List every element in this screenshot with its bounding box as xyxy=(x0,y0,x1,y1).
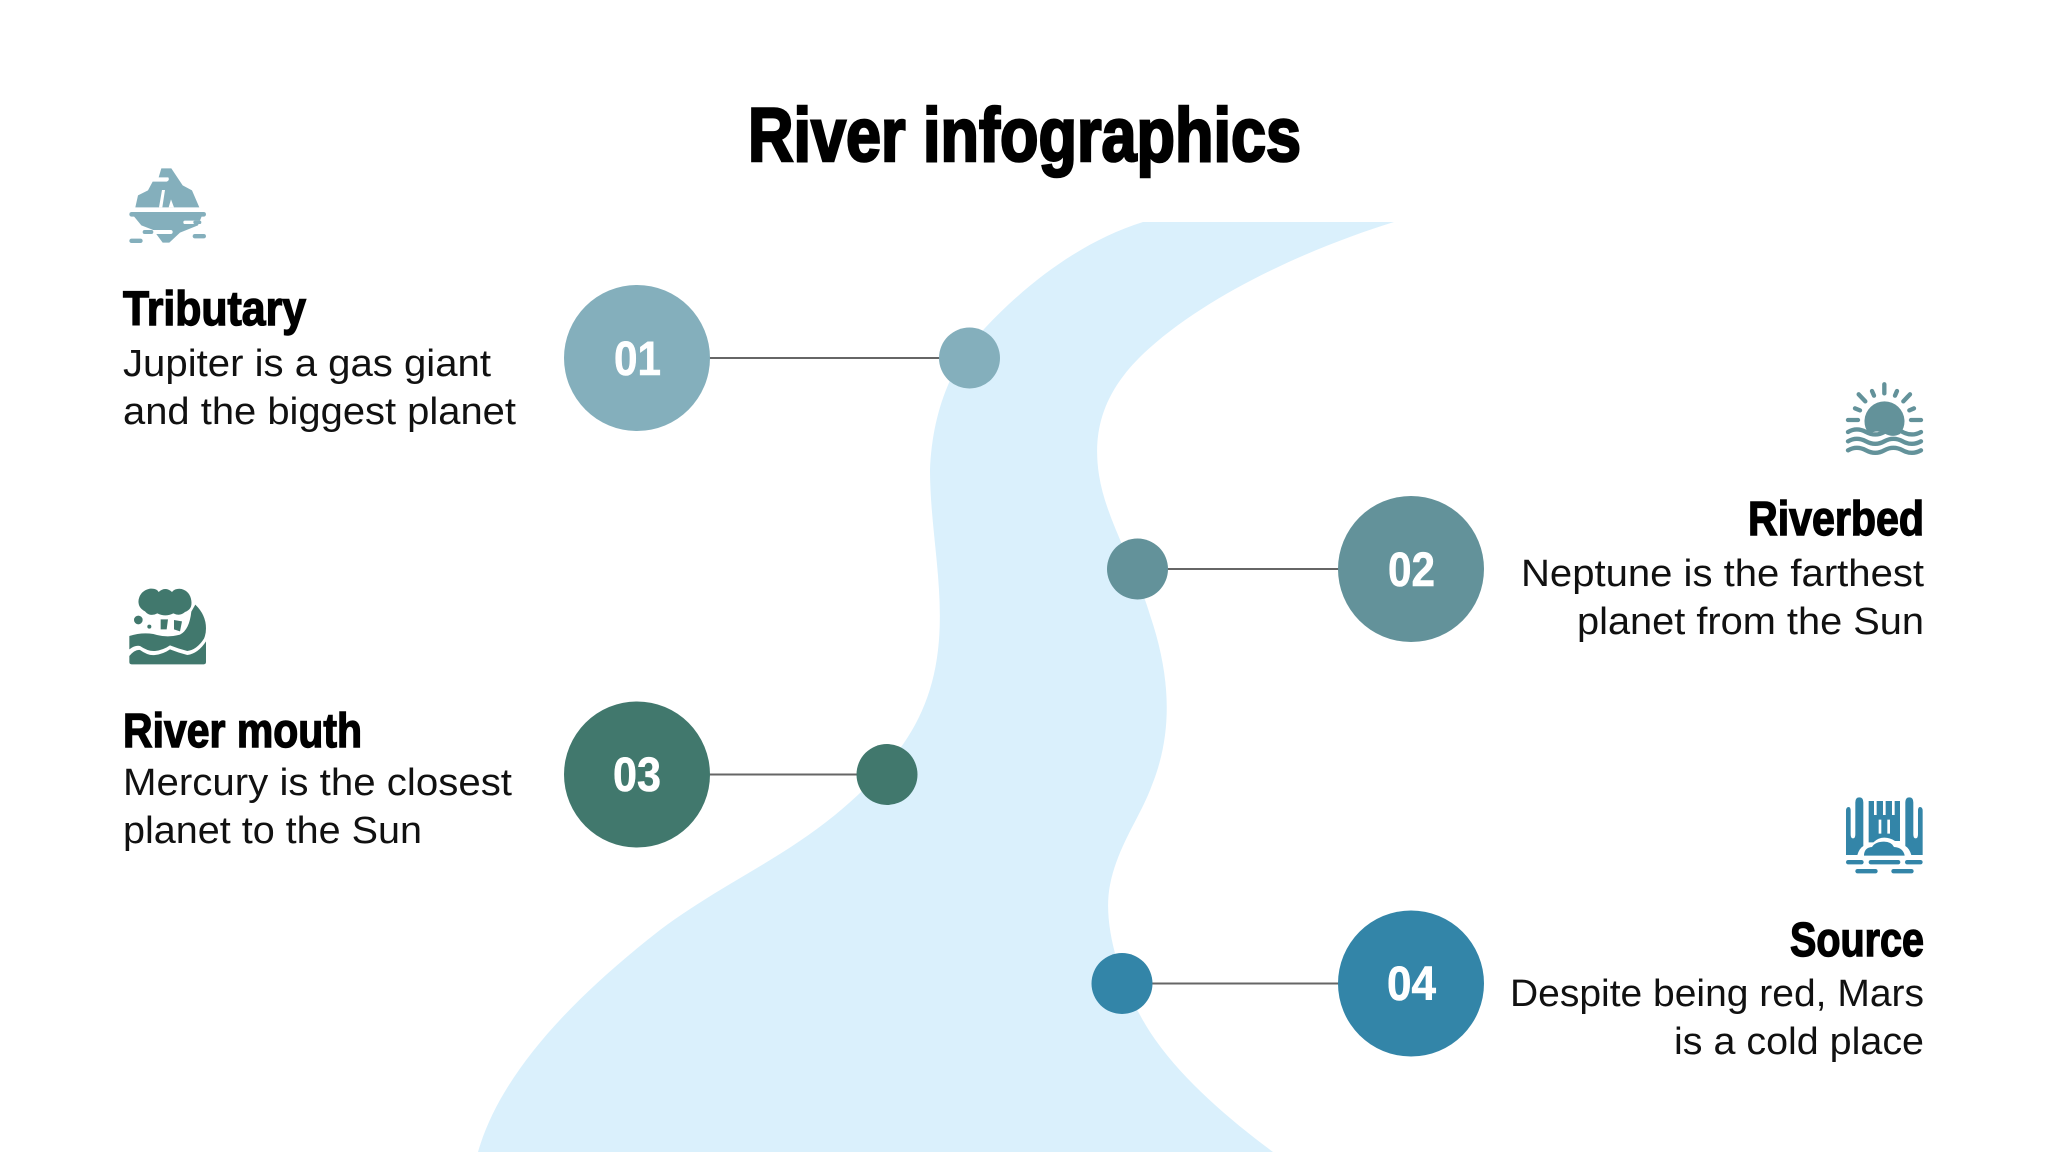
item 03: River mouth xyxy=(123,589,918,852)
description: River mouth: planet to the Sun xyxy=(123,810,422,852)
connector line 04 xyxy=(1145,982,1345,984)
icon: iceberg xyxy=(129,168,206,243)
river shape xyxy=(478,222,1394,1152)
heading: Riverbed: Riverbed xyxy=(1748,493,1924,546)
heading: River mouth: River mouth xyxy=(123,705,362,758)
description: Riverbed: planet from the Sun xyxy=(1577,601,1924,643)
river marker 02 xyxy=(1107,538,1168,600)
item 04: Source xyxy=(1092,797,1924,1063)
description: Source: Despite being red, Mars xyxy=(1510,973,1924,1015)
number circle 02: 02 xyxy=(1388,544,1435,597)
icon: sunset over water xyxy=(1848,384,1921,453)
title: River infographics xyxy=(748,93,1301,178)
river marker 03 xyxy=(856,744,918,805)
description: Riverbed: Neptune is the farthest xyxy=(1521,553,1924,595)
river marker 04 xyxy=(1092,953,1152,1014)
river marker 01 xyxy=(939,328,1000,388)
icon: waterfall xyxy=(1846,797,1923,873)
number circle 03: 03 xyxy=(613,749,661,802)
connector line 02 xyxy=(1160,568,1345,570)
description: Riverbed xyxy=(1521,553,1924,643)
description: River mouth xyxy=(123,762,512,852)
number circle 03 xyxy=(564,702,710,848)
number circle 01: 01 xyxy=(614,333,661,386)
connector line 01 xyxy=(700,357,945,359)
number circle 01 xyxy=(564,285,710,431)
item 02: Riverbed xyxy=(1107,384,1924,643)
icon: wave xyxy=(129,589,206,664)
description: Tributary: and the biggest planet xyxy=(123,391,516,433)
heading: Source: Source xyxy=(1790,914,1924,967)
number circle 02 xyxy=(1338,496,1484,642)
heading: Tributary: Tributary xyxy=(123,283,306,336)
item 01: Tributary xyxy=(123,168,1000,433)
number circle 04: 04 xyxy=(1387,958,1436,1011)
number circle 04 xyxy=(1338,910,1484,1056)
description: Tributary xyxy=(123,343,516,433)
description: River mouth: Mercury is the closest xyxy=(123,762,512,804)
description: Tributary: Jupiter is a gas giant xyxy=(123,343,491,385)
connector line 03 xyxy=(700,774,870,776)
description: Source: is a cold place xyxy=(1674,1021,1924,1063)
description: Source xyxy=(1510,973,1924,1063)
